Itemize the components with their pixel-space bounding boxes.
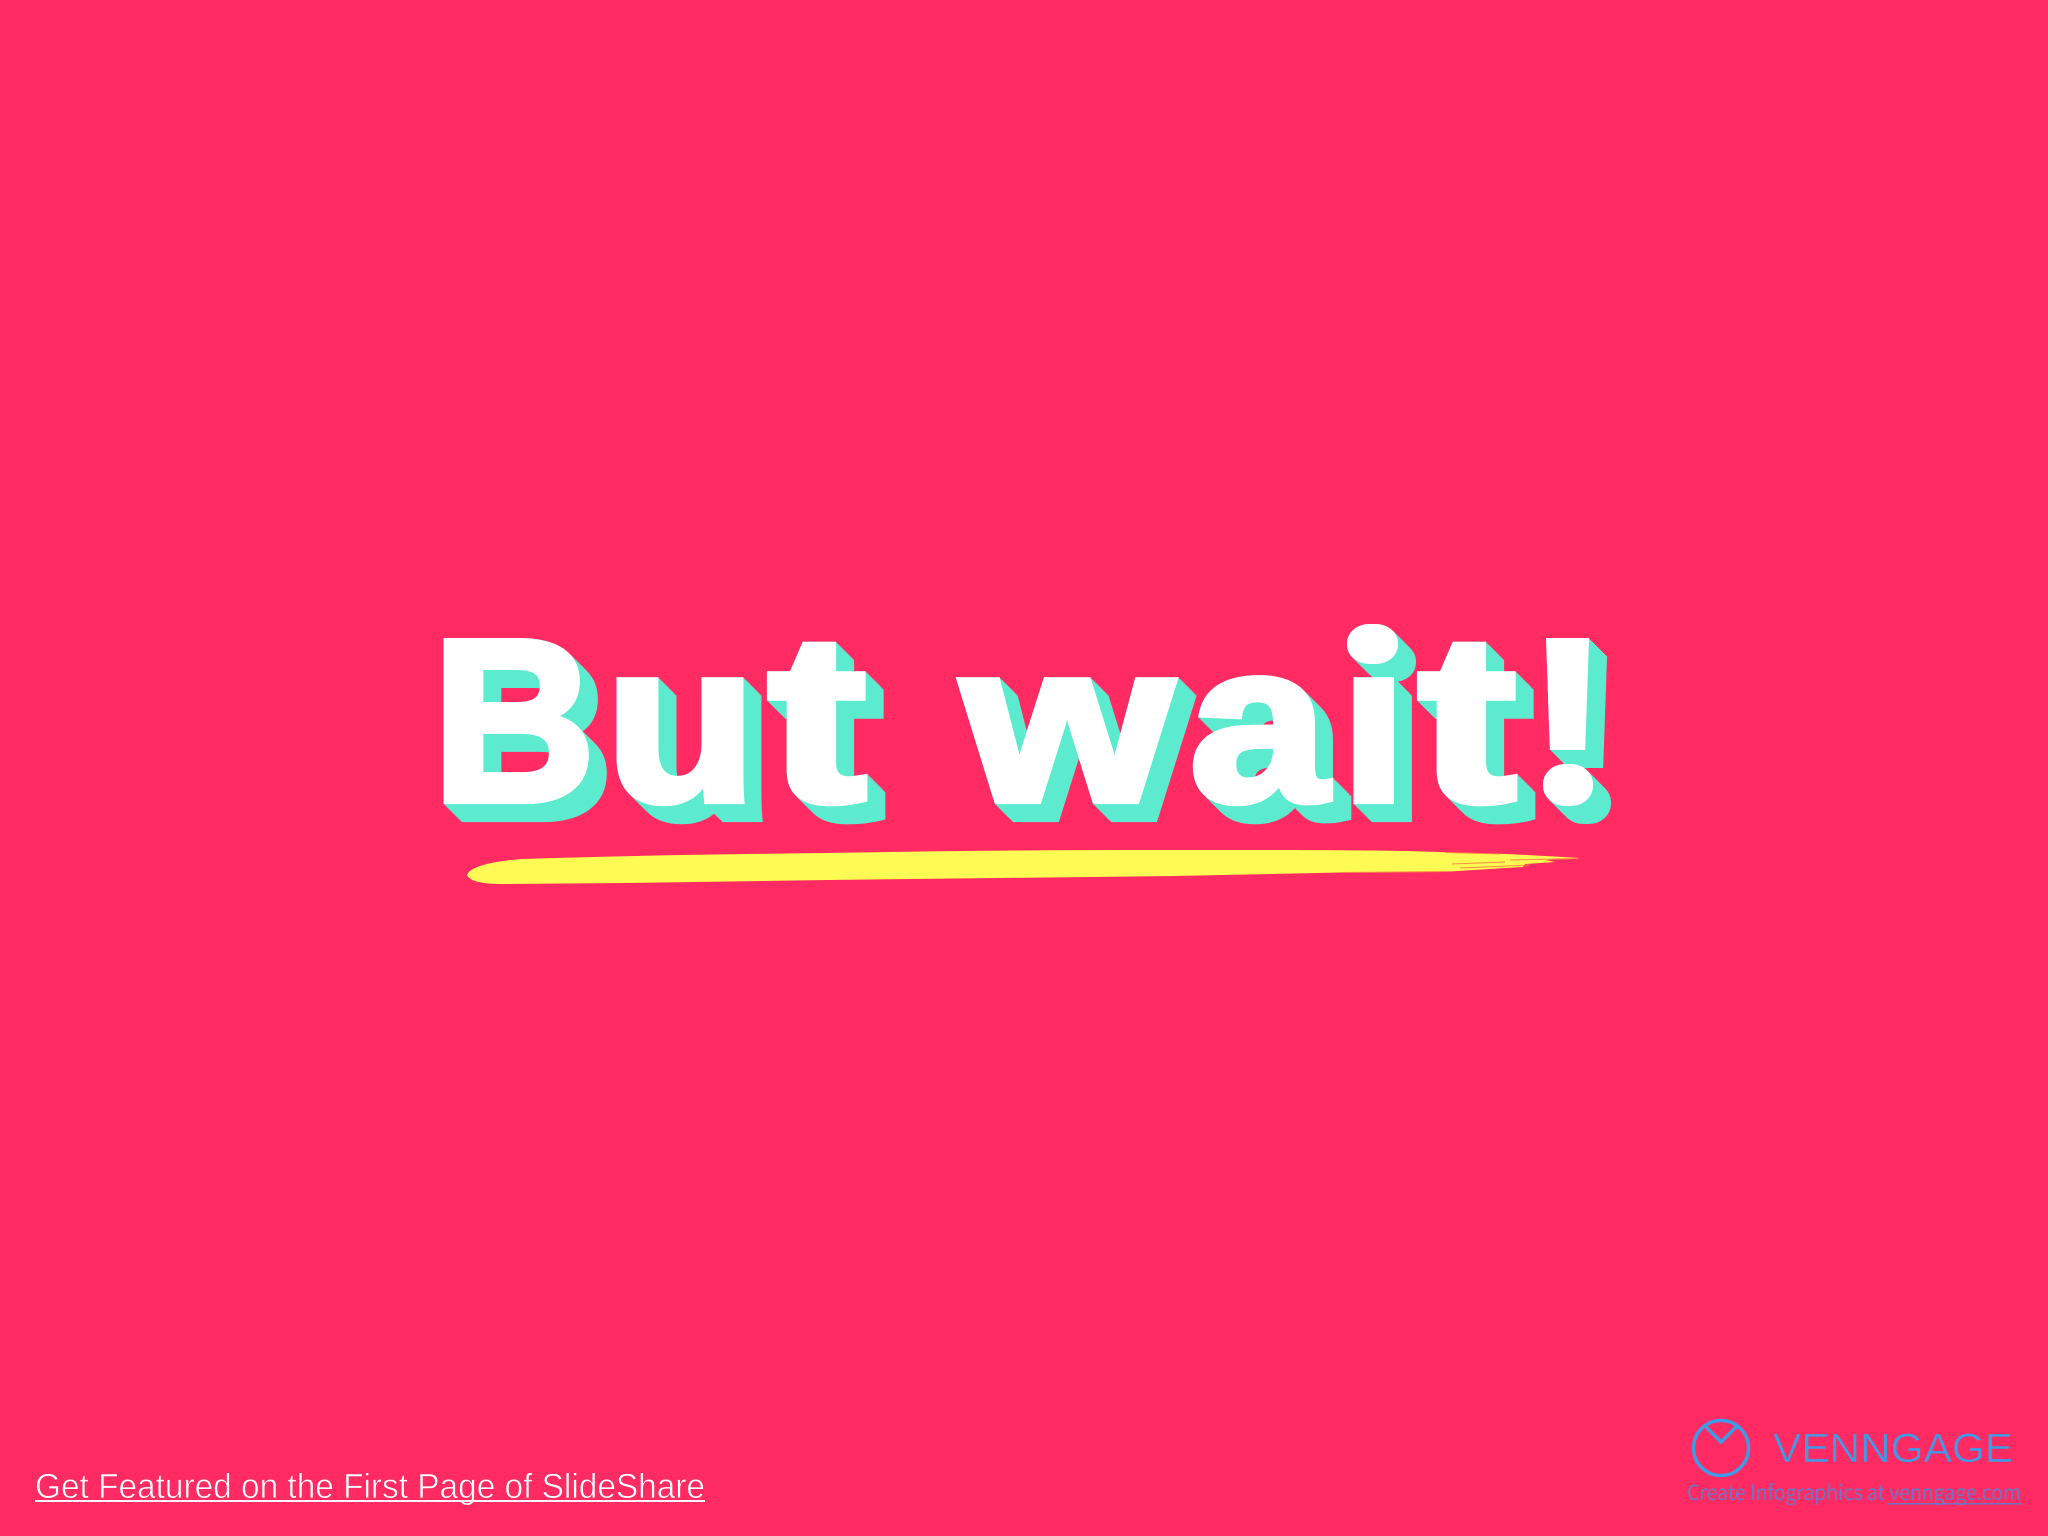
- link: Get Featured on the First Page of SlideShare: Get Featured on the First Page of SlideShare: [35, 1467, 705, 1506]
- title: But wait!: t: [768, 586, 866, 852]
- title: But wait!: a: [1190, 597, 1330, 849]
- logo icon: Venngage circle: [1694, 1420, 1748, 1476]
- title: But wait!: !: [1527, 593, 1608, 850]
- title: But wait!: B: [432, 593, 596, 850]
- title: But wait!: i: [1340, 597, 1407, 849]
- credit: Create Infographics at venngage.com: Create Infographics at venngage.com: [1687, 1477, 2021, 1507]
- title: But wait!: w: [961, 597, 1174, 849]
- title: But wait!: u: [605, 597, 757, 849]
- logo wordmark: VENNGAGE: VENNGAGE: [1773, 1425, 2013, 1471]
- title: But wait!: [444, 624, 1611, 824]
- title: But wait!: t: [1418, 586, 1516, 852]
- yellow brush underline: [467, 850, 1580, 884]
